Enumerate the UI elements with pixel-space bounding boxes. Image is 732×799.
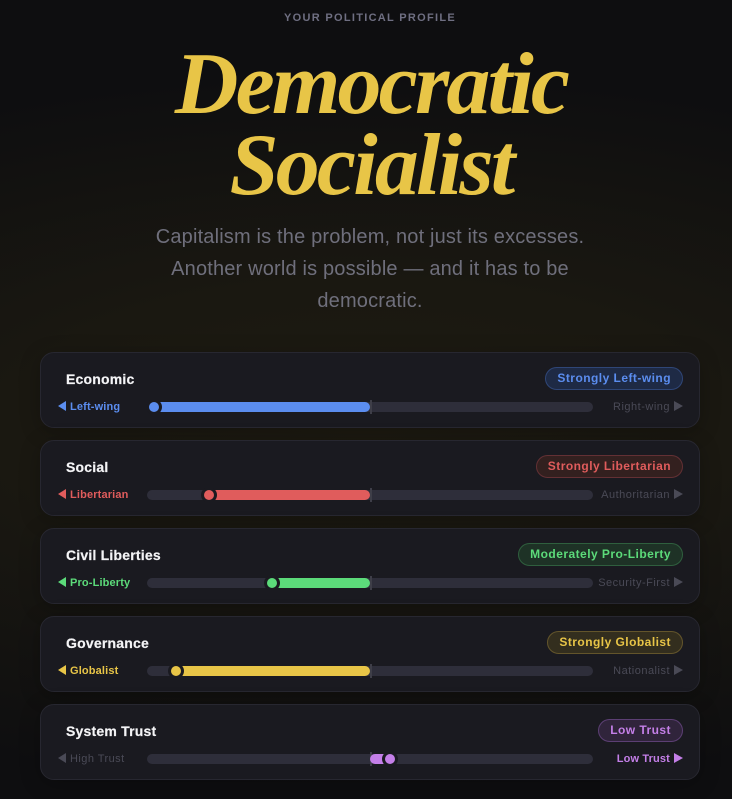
left pole label: Globalist — [70, 665, 118, 677]
score fill — [154, 402, 370, 412]
score fill — [176, 666, 370, 676]
score thumb — [171, 666, 181, 676]
panel: System Trust — [40, 704, 700, 780]
subtitle: Capitalism is the problem, not just its excesses. — [156, 226, 584, 248]
verdict pill — [545, 367, 683, 390]
axis name: System Trust — [66, 723, 156, 739]
right pole label: Low Trust — [617, 753, 670, 765]
right pole label: Authoritarian — [601, 489, 670, 501]
score track — [147, 578, 593, 588]
score fill — [370, 754, 390, 764]
left pole label: High Trust — [70, 753, 125, 765]
score thumb — [149, 402, 159, 412]
axis name: Civil Liberties — [66, 547, 161, 563]
score thumb — [385, 754, 395, 764]
title line 1: Democratic — [175, 36, 567, 133]
center tick — [370, 488, 372, 502]
center tick — [370, 752, 372, 766]
subtitle: democratic. — [317, 290, 423, 312]
score track — [147, 666, 593, 676]
panel: Governance — [40, 616, 700, 692]
right pole label: Nationalist — [613, 665, 670, 677]
right pole label: Security-First — [598, 577, 670, 589]
verdict pill — [518, 543, 683, 566]
score fill — [209, 490, 370, 500]
center tick — [370, 664, 372, 678]
verdict pill — [598, 719, 683, 742]
score thumb — [204, 490, 214, 500]
subtitle: Another world is possible — and it has to be — [171, 258, 569, 280]
verdict pill: Low Trust — [610, 723, 671, 737]
title line 2: Socialist — [230, 117, 512, 214]
eyebrow label: YOUR POLITICAL PROFILE — [284, 12, 456, 24]
verdict pill: Strongly Libertarian — [548, 459, 671, 473]
subtitle — [156, 226, 584, 312]
axis name: Governance — [66, 635, 149, 651]
score thumb — [267, 578, 277, 588]
center tick — [370, 400, 372, 414]
score track — [147, 402, 593, 412]
verdict pill: Moderately Pro-Liberty — [530, 547, 671, 561]
verdict pill — [536, 455, 683, 478]
left pole label: Libertarian — [70, 489, 128, 501]
score track — [147, 490, 593, 500]
panel: Civil Liberties — [40, 528, 700, 604]
left pole label: Pro-Liberty — [70, 577, 130, 589]
verdict pill: Strongly Globalist — [559, 635, 671, 649]
axis name: Social — [66, 459, 108, 475]
score track — [147, 754, 593, 764]
center tick — [370, 576, 372, 590]
panel: Social — [40, 440, 700, 516]
axis name: Economic — [66, 371, 135, 387]
left pole label: Left-wing — [70, 401, 120, 413]
verdict pill — [547, 631, 683, 654]
verdict pill: Strongly Left-wing — [557, 371, 671, 385]
panel: Economic — [40, 352, 700, 428]
right pole label: Right-wing — [613, 401, 670, 413]
score fill — [272, 578, 370, 588]
